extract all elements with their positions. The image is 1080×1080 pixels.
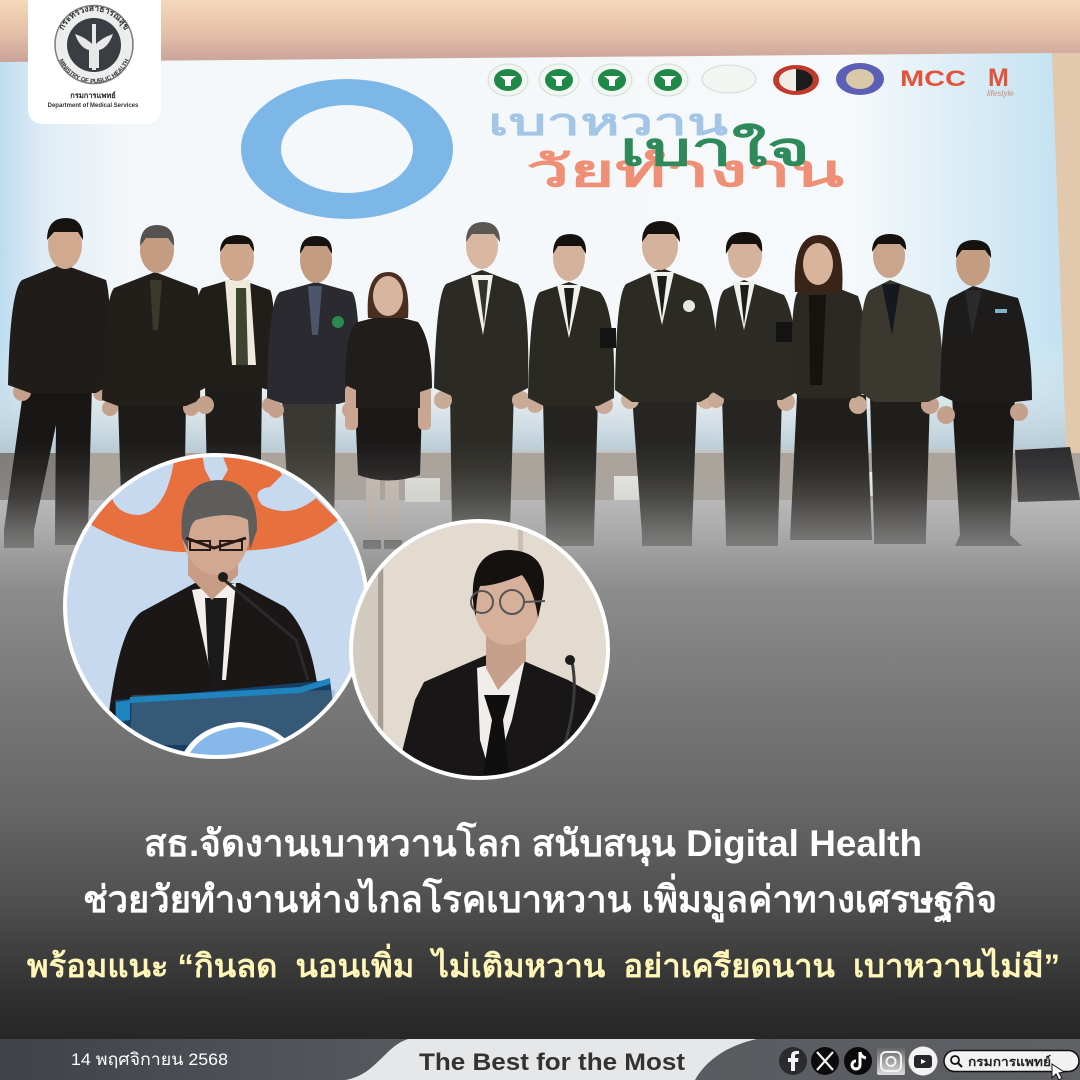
screen: partner logos: M: [988, 64, 1009, 92]
screen: blue diabetes circle: [241, 79, 453, 219]
person 9: [708, 232, 798, 546]
person 12: [937, 240, 1032, 546]
person 7: [527, 234, 616, 546]
person 1: [4, 218, 110, 548]
footer slogan ribbon: [345, 1039, 757, 1080]
logo caption: กรมการแพทย์: [70, 91, 116, 100]
headline: ช่วยวัยทำงานห่างไกลโรคเบาหวาน เพิ่มมูลค่าทางเศรษฐกิจ: [83, 873, 997, 923]
logo card: [28, 0, 161, 124]
person 5: [345, 272, 432, 549]
screen: event title: [488, 102, 844, 196]
person 11: [860, 234, 943, 544]
icon: facebook: [779, 1047, 807, 1075]
screen: partner logos: MCC: [900, 66, 966, 91]
person 4: [267, 236, 360, 530]
person 3: [192, 235, 278, 530]
screen: partner logos: [488, 63, 1014, 98]
logo: Ministry of Public Health seal: MINISTRY OF PUBLIC HEALTH: [59, 58, 129, 83]
group of twelve officials: [4, 218, 1032, 549]
headline: สธ.จัดงานเบาหวานโลก สนับสนุน Digital Health: [144, 821, 922, 867]
footer date: 14 พฤศจิกายน 2568: [71, 1050, 228, 1069]
screen: partner logos: lifestyle: [987, 89, 1014, 98]
screen: event title: วัยทำงาน: [526, 147, 844, 196]
portrait: speaker at podium: [60, 450, 372, 762]
grey gradient overlay: [0, 440, 1080, 1040]
footer slogan ribbon: The Best for the Most: [419, 1049, 685, 1076]
screen: event title: เบาหวาน: [488, 102, 728, 144]
person 2: [102, 225, 201, 530]
footer bar: [0, 1039, 1080, 1080]
portrait: second speaker: [350, 520, 610, 780]
logo caption: Department of Medical Services: [48, 103, 139, 109]
search pill: [944, 1050, 1079, 1080]
person 10: [790, 235, 872, 540]
person 6: [434, 222, 530, 530]
headline: [83, 821, 997, 923]
icon: youtube: [908, 1046, 938, 1076]
icon: tiktok: [844, 1047, 872, 1075]
screen: event title: เบาใจ: [620, 122, 810, 175]
person 8: [615, 221, 718, 546]
icon: instagram: [877, 1048, 905, 1075]
logo caption: [48, 91, 139, 109]
logo: Ministry of Public Health seal: กระทรวงสาธารณสุข: [60, 6, 129, 30]
sub-headline advice: พร้อมแนะ “กินลด นอนเพิ่ม ไม่เติมหวาน อย่าเครียดนาน เบาหวานไม่มี”: [27, 943, 1060, 984]
logo: Ministry of Public Health seal: [54, 4, 134, 84]
search pill: กรมการแพทย์: [968, 1054, 1051, 1069]
icon: X: [811, 1047, 839, 1075]
